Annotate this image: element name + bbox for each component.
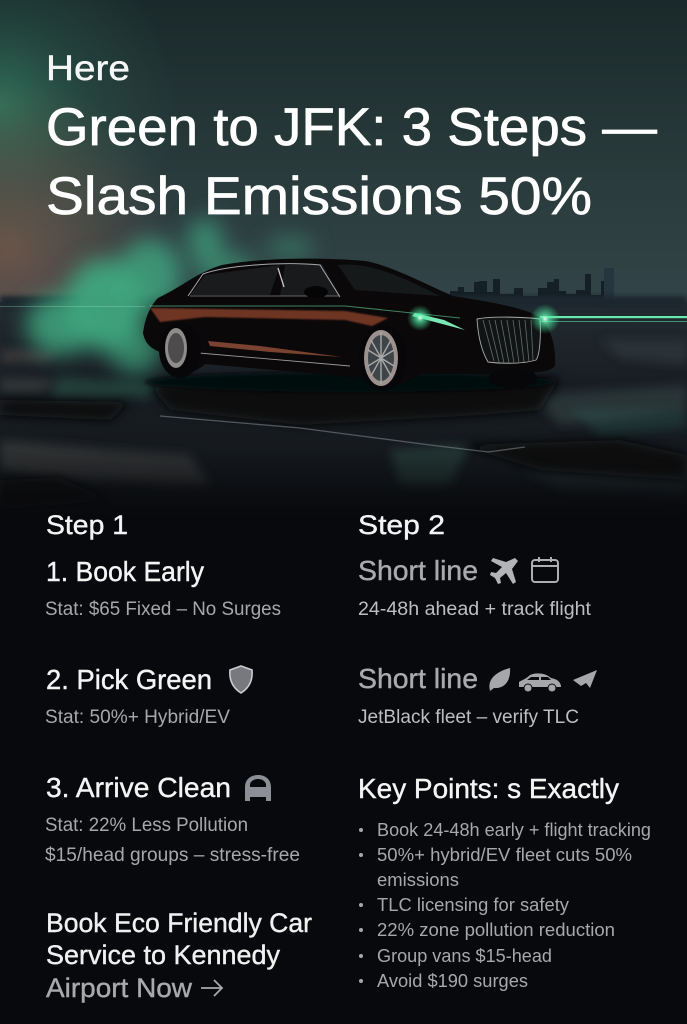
title: Slash Emissions 50% <box>46 167 592 226</box>
item short line two <box>358 663 597 728</box>
copper body side highlight <box>150 308 388 326</box>
icon: plane small <box>573 670 597 688</box>
panel: step 2 column <box>358 510 651 991</box>
icon: calendar <box>532 557 558 582</box>
item short line two: Short line <box>358 663 478 694</box>
mirror <box>304 286 328 298</box>
call to action <box>46 908 312 1003</box>
title: Green to JFK: 3 Steps — <box>46 98 657 157</box>
grille <box>477 317 540 363</box>
item short line one <box>358 555 592 620</box>
item 1 book early: Stat: $65 Fixed – No Surges <box>45 599 281 620</box>
heading: key points: Key Points: s Exactly <box>358 773 619 804</box>
icon: car side <box>519 673 561 692</box>
item short line one: 24-48h ahead + track flight <box>358 599 592 620</box>
icon: shield <box>230 666 252 693</box>
item short line one: Short line <box>358 555 478 586</box>
call to action: Service to Kennedy <box>46 940 280 970</box>
item 3 arrive clean: $15/head groups – stress-free <box>45 845 300 866</box>
icon: car front <box>245 775 271 801</box>
headlight and light streaks <box>0 304 687 334</box>
heading block <box>46 49 657 226</box>
heading: step 1: Step 1 <box>46 510 128 540</box>
item 1 book early: 1. Book Early <box>46 556 204 587</box>
eyebrow: Here <box>46 49 130 88</box>
wet ground reflections <box>0 340 687 495</box>
windows <box>190 265 280 295</box>
key points list: 22% zone pollution reduction <box>377 919 615 940</box>
icon: arrow <box>201 980 222 996</box>
chrome sill line <box>199 353 350 366</box>
key points list: Group vans $15-head <box>377 945 552 966</box>
icon: leaf <box>489 668 510 691</box>
limousine car <box>0 259 687 392</box>
key points list: emissions <box>377 869 459 890</box>
item 3 arrive clean <box>45 772 300 866</box>
icon: plane <box>490 558 518 584</box>
item short line two: JetBlack fleet – verify TLC <box>358 707 579 728</box>
distant skyline <box>450 268 614 307</box>
item 2 pick green: 2. Pick Green <box>46 664 212 695</box>
parking line <box>160 416 525 452</box>
key points list: Avoid $190 surges <box>377 970 528 991</box>
heading: step 2: Step 2 <box>358 510 445 540</box>
panel: step 1 column <box>45 510 312 1003</box>
item 1 book early <box>45 556 281 620</box>
title <box>46 98 657 226</box>
call to action: Book Eco Friendly Car <box>46 908 312 938</box>
wheels <box>159 322 537 391</box>
key points list: Book 24-48h early + flight tracking <box>377 819 651 840</box>
item 2 pick green: Stat: 50%+ Hybrid/EV <box>45 707 230 728</box>
key points list <box>359 819 651 991</box>
car body <box>143 259 555 386</box>
green smoke <box>26 218 314 374</box>
key points list: TLC licensing for safety <box>377 894 570 915</box>
item 3 arrive clean: 3. Arrive Clean <box>46 772 231 803</box>
call to action: Airport Now <box>46 973 193 1003</box>
car shadow <box>145 372 555 392</box>
item 3 arrive clean: Stat: 22% Less Pollution <box>45 815 248 836</box>
item 2 pick green <box>45 664 252 728</box>
key points list: 50%+ hybrid/EV fleet cuts 50% <box>377 844 632 865</box>
